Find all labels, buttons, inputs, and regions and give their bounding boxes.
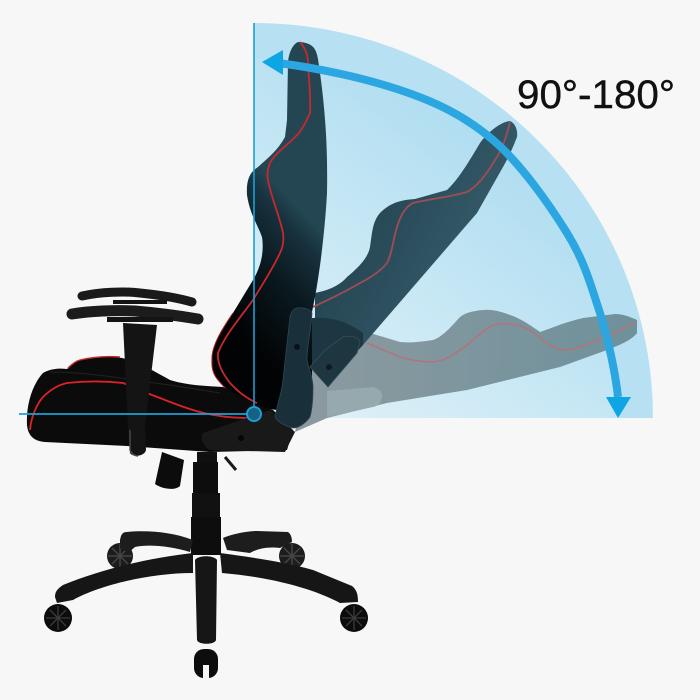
tilt knob [155,452,184,489]
armrest pads [72,292,198,322]
base: front legs [55,553,358,644]
base: rear legs [120,531,292,553]
armrest post [123,323,157,456]
caster wheels: front [44,604,368,678]
gas lift [191,452,221,555]
pivot point [247,407,261,421]
seat bracket [202,410,295,452]
angle label: 90°-180° [517,73,675,117]
chair back: 45 degree position [312,121,517,370]
chair back: flat position [295,310,637,432]
caster wheels: rear [107,543,305,569]
vertical reference line [253,23,255,410]
angle arc arrow [262,50,631,418]
chair back: upright position [212,42,327,410]
seat cushion [27,357,293,452]
angle sector [254,23,653,418]
horizontal reference line [19,413,247,415]
recline brackets [275,308,360,428]
tilt lever [225,457,236,470]
